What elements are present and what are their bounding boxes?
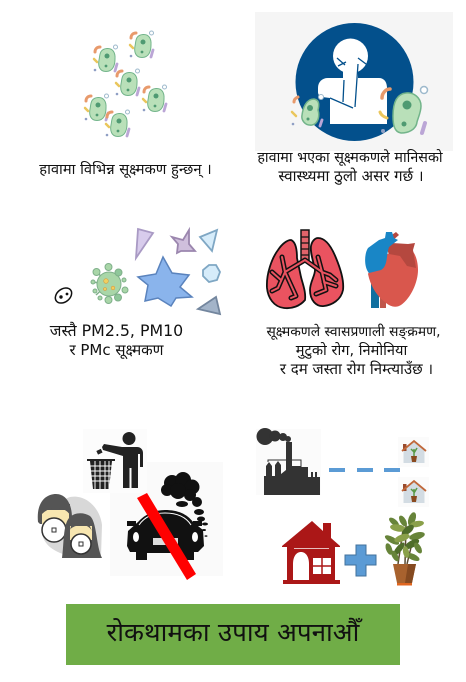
icon: factory with smoke <box>256 428 321 495</box>
panel: diseases: र दम जस्ता रोग निम्त्याउँछ । <box>280 360 433 378</box>
panel: health effect: स्वास्थ्यमा ठुलो असर गर्छ । <box>278 167 424 186</box>
icon: plus sign <box>345 545 376 576</box>
panel: prevention icons left <box>38 429 223 580</box>
icon: person coughing with microbes <box>255 12 453 151</box>
panel: health effect <box>255 12 453 186</box>
panel: diseases <box>266 230 441 378</box>
icon: small house with plant, top <box>398 437 429 467</box>
icon: cluster of microbes <box>85 31 166 136</box>
call to action banner: रोकथामका उपाय अपनाऔँ <box>107 617 363 648</box>
panel: prevention icons right <box>256 428 429 586</box>
icon: person using dustbin <box>83 429 147 493</box>
icon: particles <box>52 229 220 314</box>
icon: people wearing masks <box>38 494 102 558</box>
panel: diseases: मुटुको रोग, निमोनिया <box>296 342 407 360</box>
panel: microbes in the air <box>39 31 212 179</box>
icon: small house with plant, bottom <box>398 477 429 507</box>
icon: lungs <box>267 230 343 308</box>
arrow: dashed connector <box>329 468 400 472</box>
icon: potted plant <box>384 511 426 586</box>
text: health effect caption: हावामा भएका सूक्ष्मकणले मानिसको <box>257 148 443 167</box>
panel: particle types <box>50 229 220 360</box>
text: particle caption: जस्तै PM2.5, PM10 <box>50 321 183 340</box>
panel: particle types: र PMc सूक्ष्मकण <box>69 341 165 360</box>
text: microbes caption: हावामा विभिन्न सूक्ष्मकण हुन्छन् । <box>39 161 212 179</box>
icon: heart <box>365 232 418 308</box>
icon: red house <box>282 521 340 584</box>
call to action banner <box>66 604 400 665</box>
text: diseases caption: सूक्ष्मकणले स्वासप्रणाली सङ्क्रमण, <box>266 322 441 341</box>
icon: smoking car with red cross-out <box>110 462 223 580</box>
